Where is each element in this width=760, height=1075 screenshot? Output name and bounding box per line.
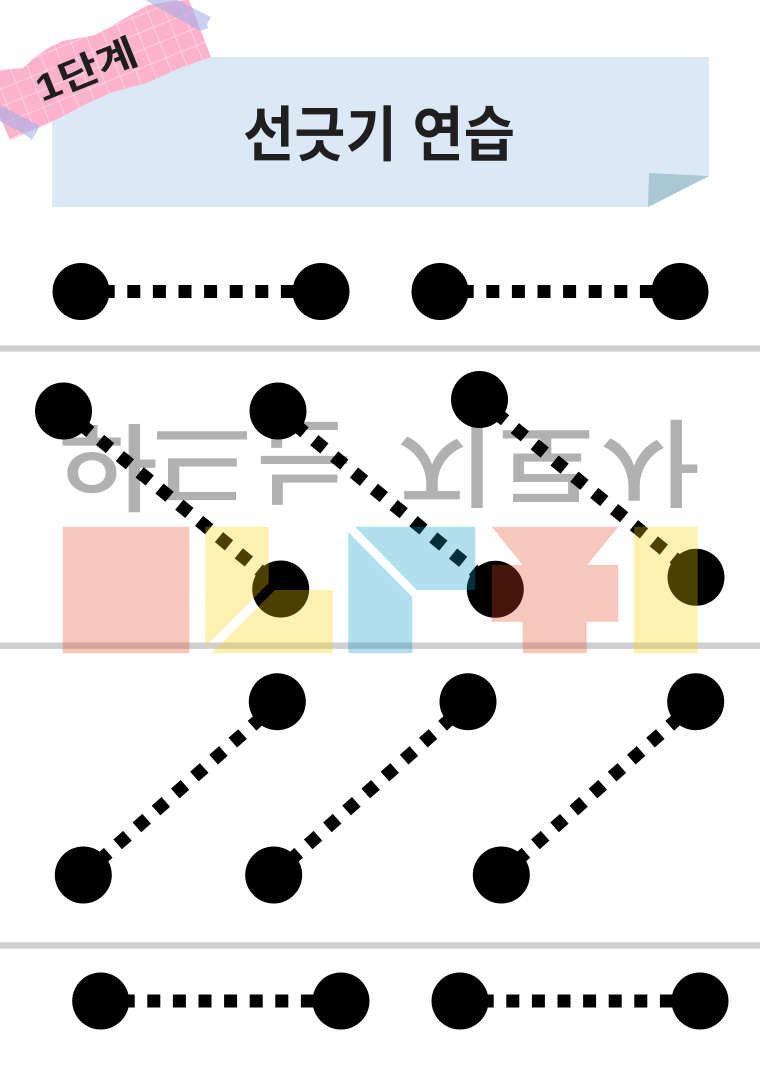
rising line 3 xyxy=(473,673,724,904)
row 4: horizontal tracing lines xyxy=(72,972,728,1030)
row 2: downward diagonal tracing lines xyxy=(35,371,724,618)
watermark wordmark: 는 xyxy=(256,407,352,514)
title: 선긋기 연습 xyxy=(243,102,515,169)
tracing line 1 xyxy=(72,972,369,1030)
row 3: upward diagonal tracing lines xyxy=(55,673,724,904)
diagonal line 1 xyxy=(35,382,309,618)
divider lines xyxy=(0,345,760,949)
watermark wordmark: 로 xyxy=(498,407,594,514)
tracing line 2 xyxy=(412,263,708,320)
watermark wordmark: 하 xyxy=(58,418,158,525)
watermark wordmark: 사 xyxy=(600,407,700,514)
logo block: blue pair xyxy=(348,527,475,653)
rising line 2 xyxy=(245,673,496,904)
rising line 1 xyxy=(55,673,306,904)
logo block: red T shape xyxy=(492,527,618,653)
logo block: yellow pair xyxy=(205,527,333,653)
logo block: yellow bar xyxy=(634,527,698,653)
logo block: red square xyxy=(63,527,189,653)
diagonal line 2 xyxy=(250,382,524,618)
tracing line 1 xyxy=(52,263,350,320)
watermark wordmark: 지 xyxy=(396,407,496,514)
watermark wordmark xyxy=(58,407,700,525)
folded corner xyxy=(648,173,709,207)
row 1: horizontal tracing lines xyxy=(52,263,708,320)
watermark logo xyxy=(58,407,700,653)
title banner panel xyxy=(52,57,709,207)
diagonal line 3 xyxy=(451,371,724,606)
watermark wordmark: 드 xyxy=(152,407,252,514)
step tag text: 1단계 xyxy=(30,32,143,109)
tracing line 2 xyxy=(432,972,728,1030)
step tag: washi tape label xyxy=(0,0,211,140)
